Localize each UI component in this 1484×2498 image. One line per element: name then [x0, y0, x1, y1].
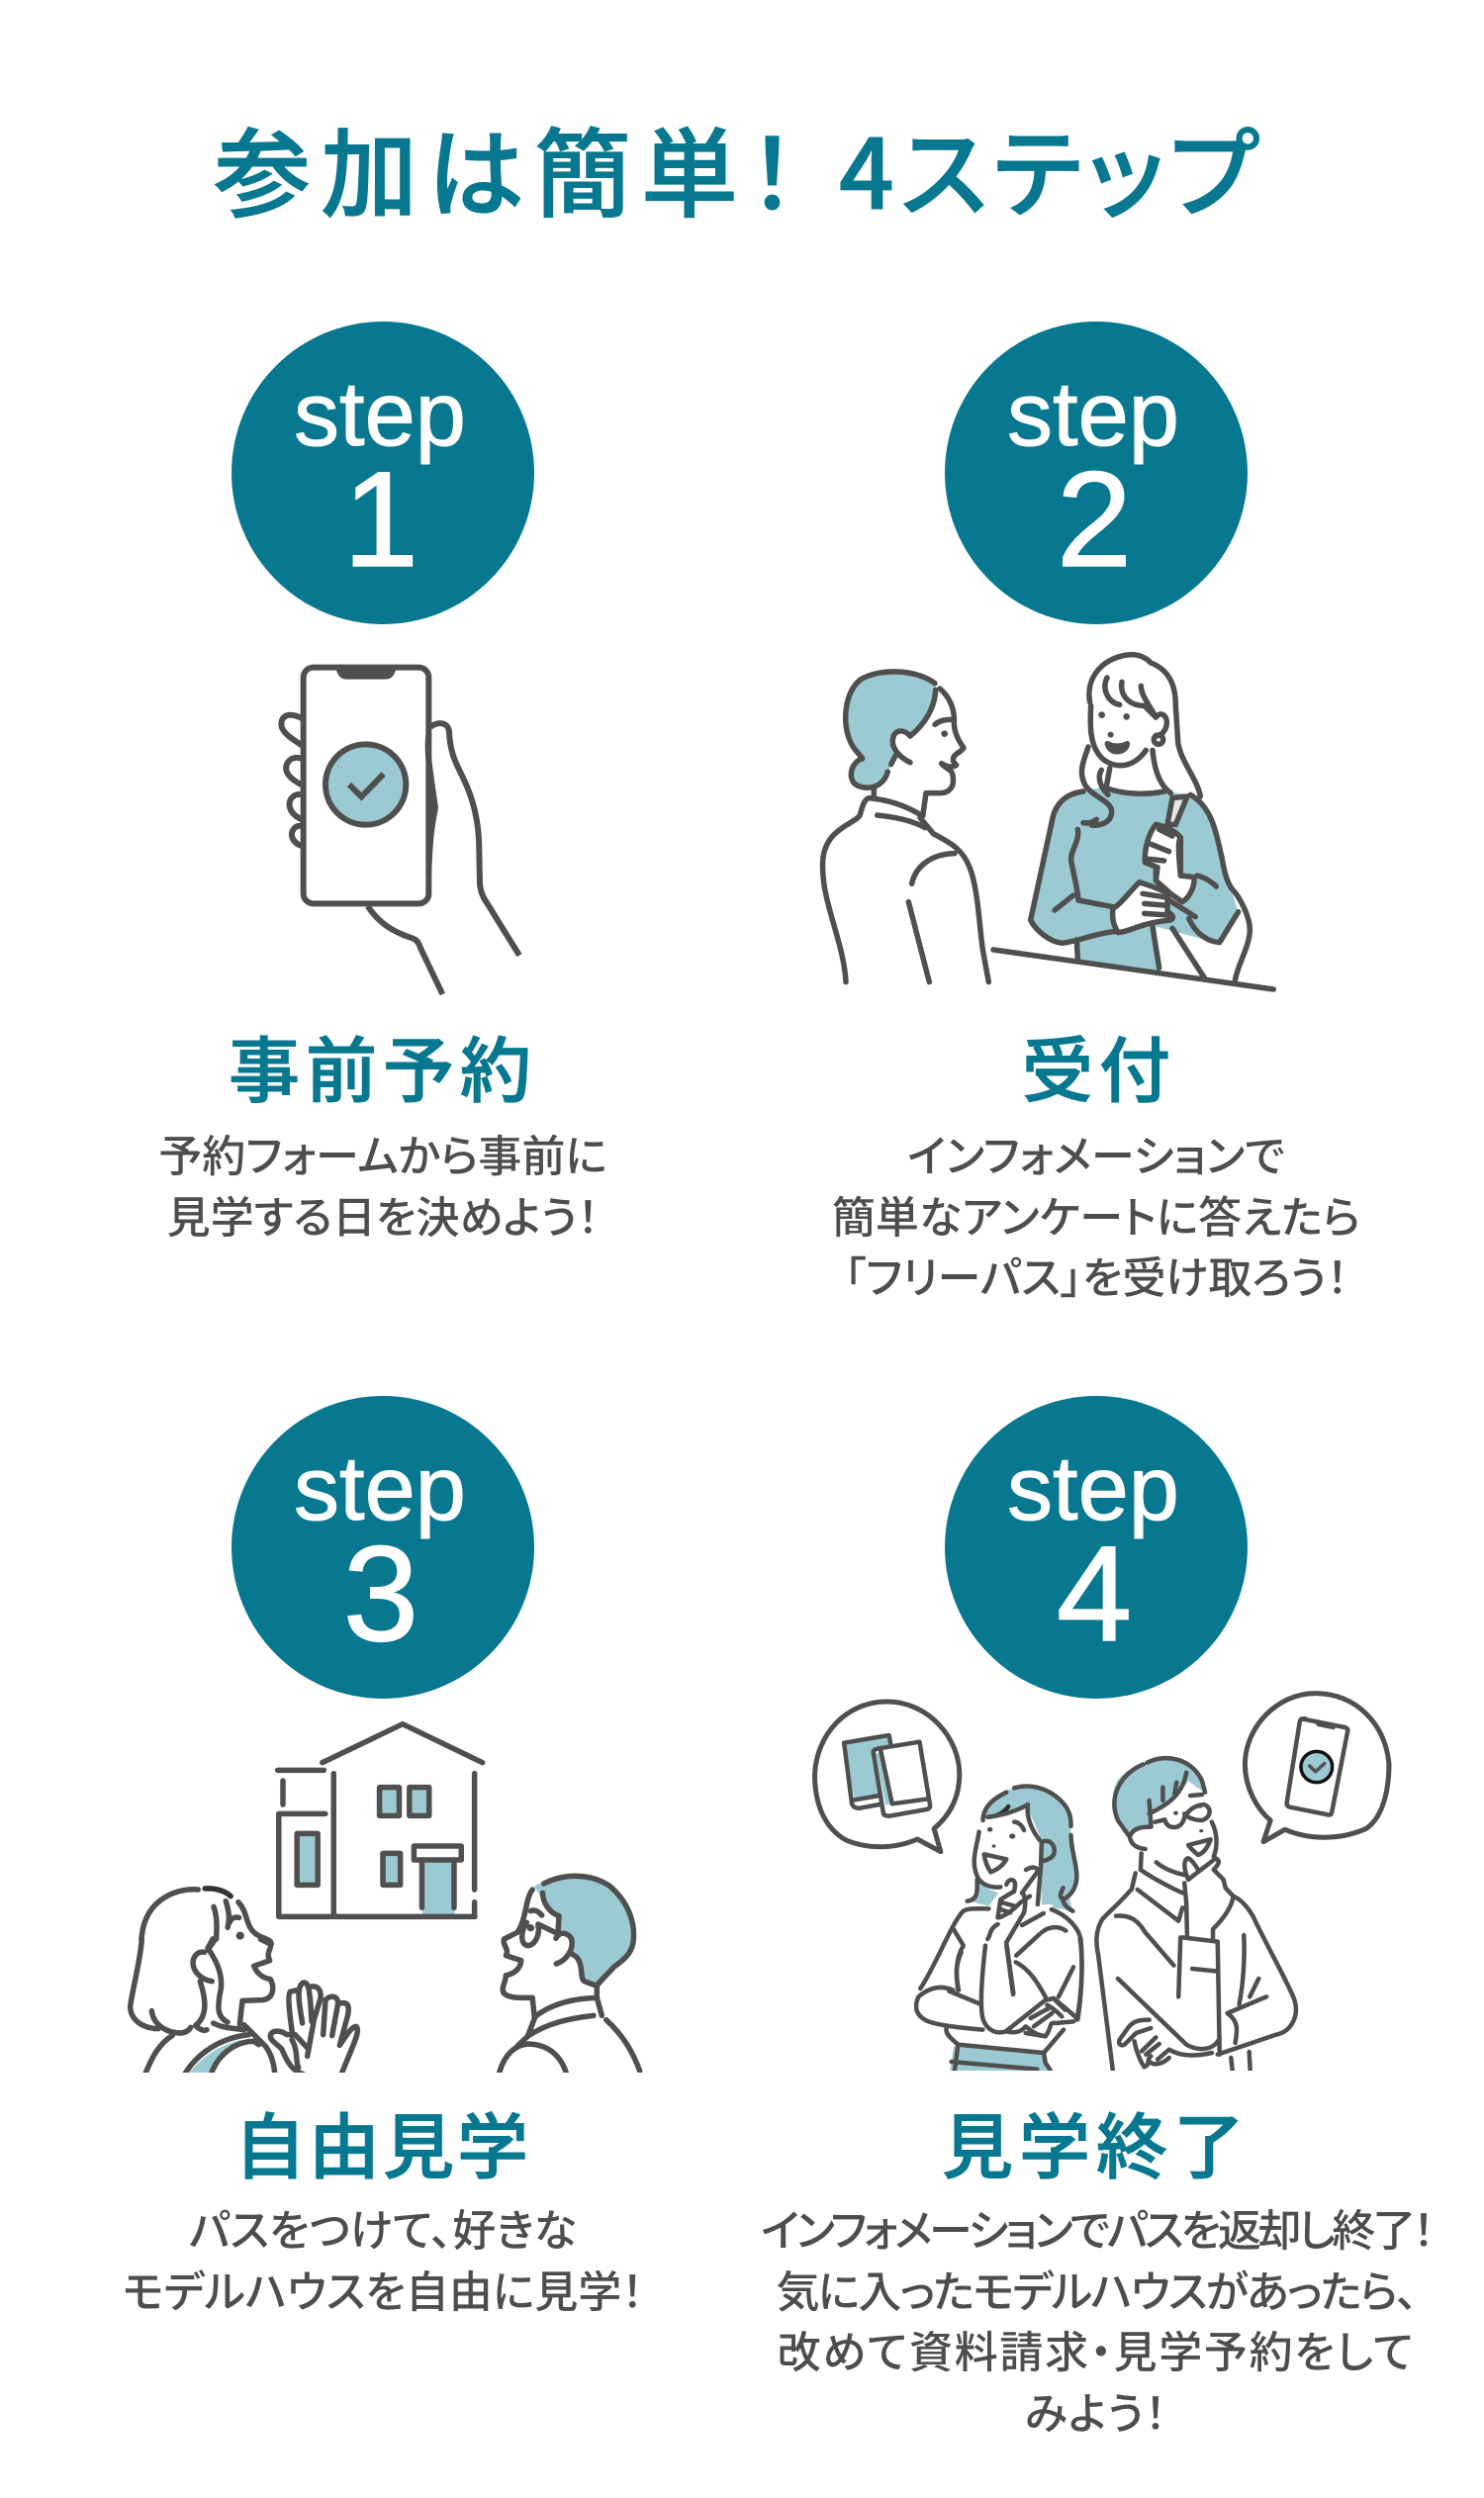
description: step 4 — [761, 2195, 1432, 2442]
description: step 4: 気に入ったモデルハウスがあったら、 — [776, 2257, 1417, 2320]
man — [1096, 1758, 1296, 2071]
description: step 2: 簡単なアンケートに答えたら — [832, 1182, 1360, 1246]
description: step 2: インフォメーションで — [907, 1121, 1285, 1184]
description: step 4: インフォメーションでパスを返却し終了！ — [761, 2195, 1432, 2259]
heading: step 2: 受付 — [1022, 1013, 1176, 1117]
icon: hand holding phone with check — [278, 665, 522, 995]
heading: step 4: 見学終了 — [942, 2089, 1251, 2193]
panel: step 1 — [158, 322, 607, 1246]
description: step 4: 改めて資料請求・見学予約をして — [778, 2317, 1415, 2380]
description: step 3: パスをつけて、好きな — [189, 2195, 577, 2259]
speech bubble: brochures — [814, 1702, 960, 1852]
title: 4ステップ — [839, 97, 1264, 237]
step 3 badge: 3 — [343, 1519, 418, 1670]
woman, lower — [131, 1939, 357, 2075]
illustration: reception scene — [819, 651, 1276, 992]
step 1 badge — [232, 322, 534, 624]
panel: step 3 — [123, 1396, 643, 2320]
description: step 3: モデルハウスを自由に見学！ — [123, 2257, 643, 2320]
man, lower — [499, 1987, 640, 2075]
description: step 1 — [158, 1121, 607, 1246]
heading: step 3: 自由見学 — [234, 2089, 531, 2193]
step 2 badge: step — [1007, 364, 1179, 465]
woman — [920, 1787, 1082, 2020]
step 4 badge — [945, 1396, 1248, 1699]
house — [278, 1724, 483, 1916]
description: step 3 — [123, 2195, 643, 2320]
description: step 2: 「フリーパス」を受け取ろう！ — [844, 1243, 1348, 1306]
panel: step 2 — [819, 322, 1360, 1306]
title — [214, 97, 1264, 237]
step 3 badge: step — [294, 1438, 466, 1539]
title: 参加は簡単！ — [214, 97, 806, 237]
step 1 badge: 1 — [343, 444, 418, 596]
receptionist — [822, 672, 988, 982]
panel: step 4 — [761, 1396, 1432, 2442]
counter — [993, 950, 1273, 989]
description: step 4: みよう！ — [1025, 2378, 1167, 2442]
lower body details — [916, 1939, 1251, 2071]
description: step 1: 予約フォームから事前に — [158, 1121, 607, 1184]
step 3 badge — [232, 1396, 534, 1699]
step 4 badge: 4 — [1057, 1519, 1132, 1670]
description: step 1: 見学する日を決めよう！ — [167, 1182, 599, 1246]
step 2 badge: 2 — [1057, 444, 1132, 596]
illustration: couple looking at house — [127, 1721, 643, 2073]
step 4 badge: step — [1007, 1438, 1179, 1539]
illustration: couple thinking — [812, 1691, 1391, 2071]
man, head — [503, 1876, 634, 2016]
customer — [1031, 655, 1250, 981]
step 2 badge — [945, 322, 1248, 624]
woman, head upper — [141, 1889, 271, 1949]
step 1 badge: step — [294, 364, 466, 465]
heading: step 1: 事前予約 — [229, 1013, 537, 1117]
description: step 2 — [832, 1121, 1360, 1306]
speech bubble: phone — [1245, 1694, 1389, 1842]
